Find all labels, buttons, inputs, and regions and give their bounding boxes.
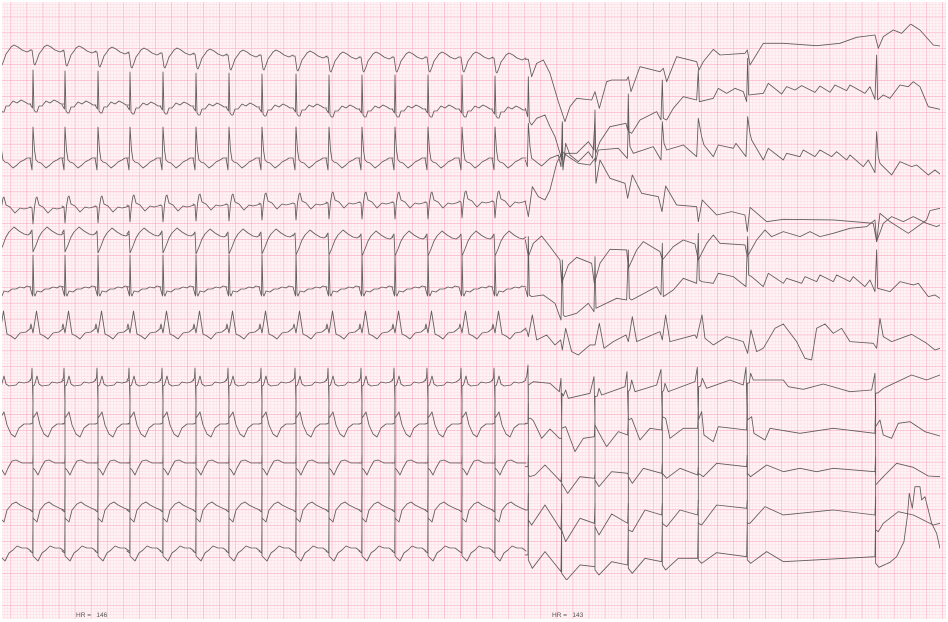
trace: lead 8	[0, 365, 940, 420]
trace: lead 1	[0, 24, 940, 122]
trace: lead 9	[0, 400, 940, 475]
trace: lead 5	[0, 217, 940, 283]
trace: lead 11	[0, 480, 940, 542]
trace: lead 12	[0, 487, 940, 580]
trace: lead 7	[0, 311, 940, 360]
trace: lead 4	[0, 152, 940, 242]
trace: lead 2	[0, 55, 940, 167]
trace: lead 6	[0, 233, 940, 320]
trace: lead 10	[0, 455, 940, 510]
trace: lead 3	[0, 117, 940, 175]
heart rate label: second segment: HR = 143	[552, 612, 584, 619]
heart rate label: first segment: HR = 146	[76, 612, 108, 619]
